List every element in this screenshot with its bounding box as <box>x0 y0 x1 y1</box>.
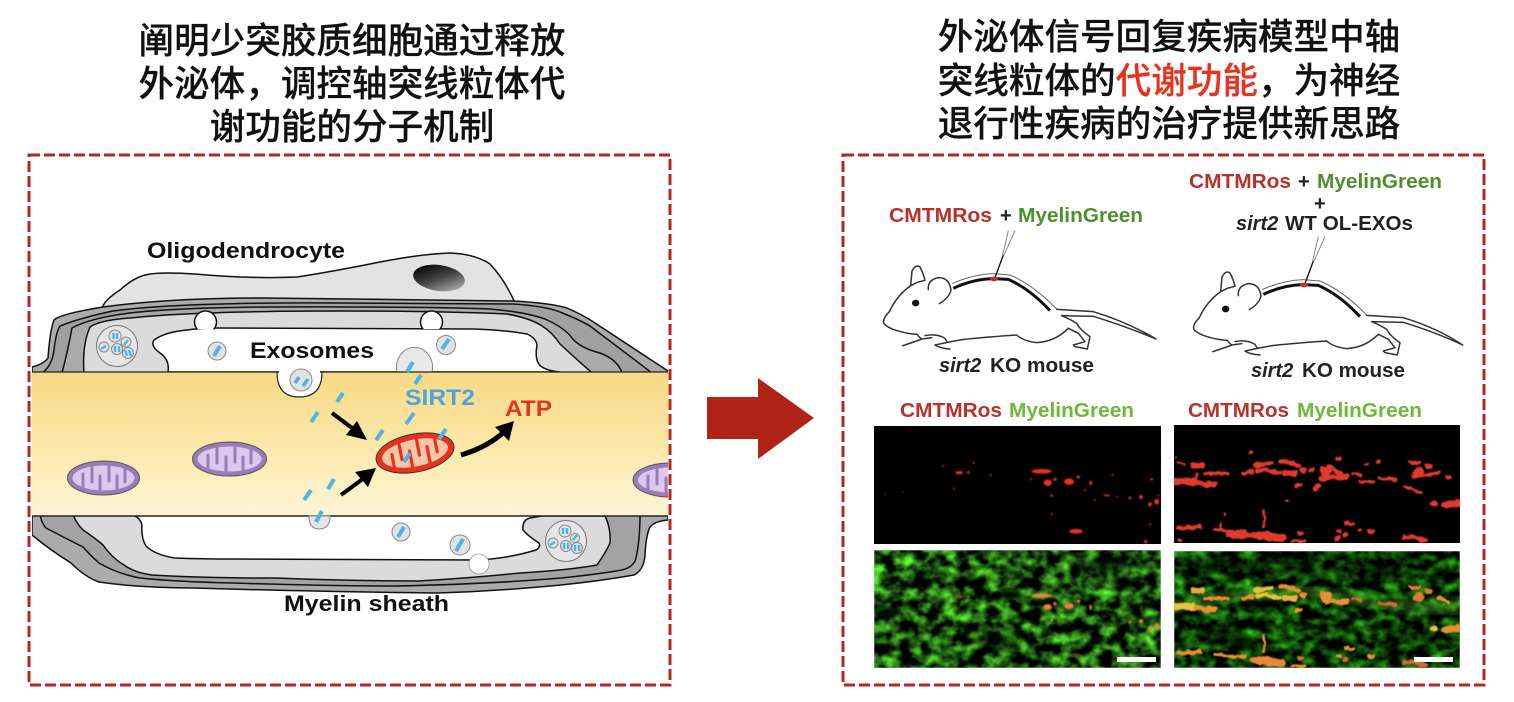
text: left dye label: CMTMRos <box>889 205 992 227</box>
title: right heading: 外泌体信号回复疾病模型中轴 <box>938 17 1400 57</box>
text: right mouse caption: sirt2 <box>1251 360 1293 382</box>
panel: exosome mechanism diagram <box>32 238 707 616</box>
upper myelin sheath <box>32 298 668 373</box>
arrow: big red arrow between panels <box>707 378 814 459</box>
label: SIRT2: SIRT2 <box>405 385 475 410</box>
panel border: left dashed frame <box>29 155 670 685</box>
arrow: exosome cargo to mitochondrion lower <box>341 468 376 495</box>
text: exosome treatment label: sirt2 <box>1236 213 1278 235</box>
purple mitochondrion 1 <box>68 461 140 495</box>
icon: mouse without exosomes <box>884 231 1156 349</box>
chart: left red channel micrograph <box>874 426 1161 544</box>
purple mitochondrion 2 <box>192 442 266 476</box>
lower myelin sheath <box>32 515 668 593</box>
icon: mouse with exosomes <box>1194 237 1463 355</box>
text: right dye label: MyelinGreen <box>1317 171 1442 193</box>
label: Myelin sheath: Myelin sheath <box>284 591 449 616</box>
lumen <box>153 328 560 372</box>
exosome in lumen upper right <box>436 336 456 354</box>
cytoplasm band <box>32 372 668 516</box>
exosome fusing with axon <box>277 369 322 397</box>
multivesicular body lower <box>546 520 586 562</box>
arrow: exosome cargo to mitochondrion upper <box>332 413 367 440</box>
exosome budding at membrane <box>396 347 432 372</box>
title: right heading: 突线粒体的代谢功能，为神经 <box>938 61 1400 101</box>
text: left dye label: MyelinGreen <box>1018 205 1143 227</box>
text: left mouse caption: sirt2 <box>939 355 981 377</box>
notch lower <box>469 554 489 574</box>
text: right mouse caption: KO mouse <box>1302 360 1405 382</box>
panel: mouse experiment results <box>874 171 1463 668</box>
label: Exosomes: Exosomes <box>250 338 374 363</box>
label: Oligodendrocyte: Oligodendrocyte <box>147 238 345 263</box>
text: right dye label: CMTMRos <box>1189 171 1291 193</box>
lumen lower <box>132 515 550 560</box>
text: left mouse caption: KO mouse <box>990 355 1094 377</box>
scale bar right <box>1414 657 1453 662</box>
multivesicular body upper <box>96 326 138 366</box>
text: right micrograph legend: CMTMRos <box>1188 400 1289 422</box>
chart: right red channel micrograph <box>1174 425 1460 543</box>
red mitochondrion <box>373 427 457 479</box>
label: ATP: ATP <box>505 396 552 421</box>
title: left heading: 阐明少突胶质细胞通过释放 <box>139 21 565 61</box>
cell nucleus <box>411 262 467 294</box>
title: left heading: 外泌体，调控轴突线粒体代 <box>139 64 565 104</box>
chart: right merged micrograph <box>1174 551 1460 668</box>
text: left dye label: + <box>1000 205 1012 227</box>
purple mitochondrion 3 <box>632 462 668 498</box>
arrow: ATP production <box>461 421 514 455</box>
text: left micrograph legend: MyelinGreen <box>1009 400 1134 422</box>
text: left micrograph legend: CMTMRos <box>900 400 1002 422</box>
text: plus sign: + <box>1314 193 1326 215</box>
text: right dye label: + <box>1298 171 1310 193</box>
panel border: right dashed frame <box>843 155 1484 685</box>
oligodendrocyte cell body <box>103 253 515 310</box>
myelin notches <box>195 311 216 329</box>
chart: left merged micrograph <box>874 550 1161 668</box>
exosome in lumen upper left <box>208 342 226 360</box>
text: exosome treatment label: WT OL-EXOs <box>1285 213 1413 235</box>
SIRT2 particles <box>304 362 446 522</box>
axon membrane line <box>32 371 668 373</box>
text: right micrograph legend: MyelinGreen <box>1297 400 1422 422</box>
scale bar left <box>1117 657 1156 662</box>
exosomes lower lumen <box>309 516 470 555</box>
title: right heading: 退行性疾病的治疗提供新思路 <box>938 104 1400 144</box>
title: left heading: 谢功能的分子机制 <box>210 107 494 147</box>
